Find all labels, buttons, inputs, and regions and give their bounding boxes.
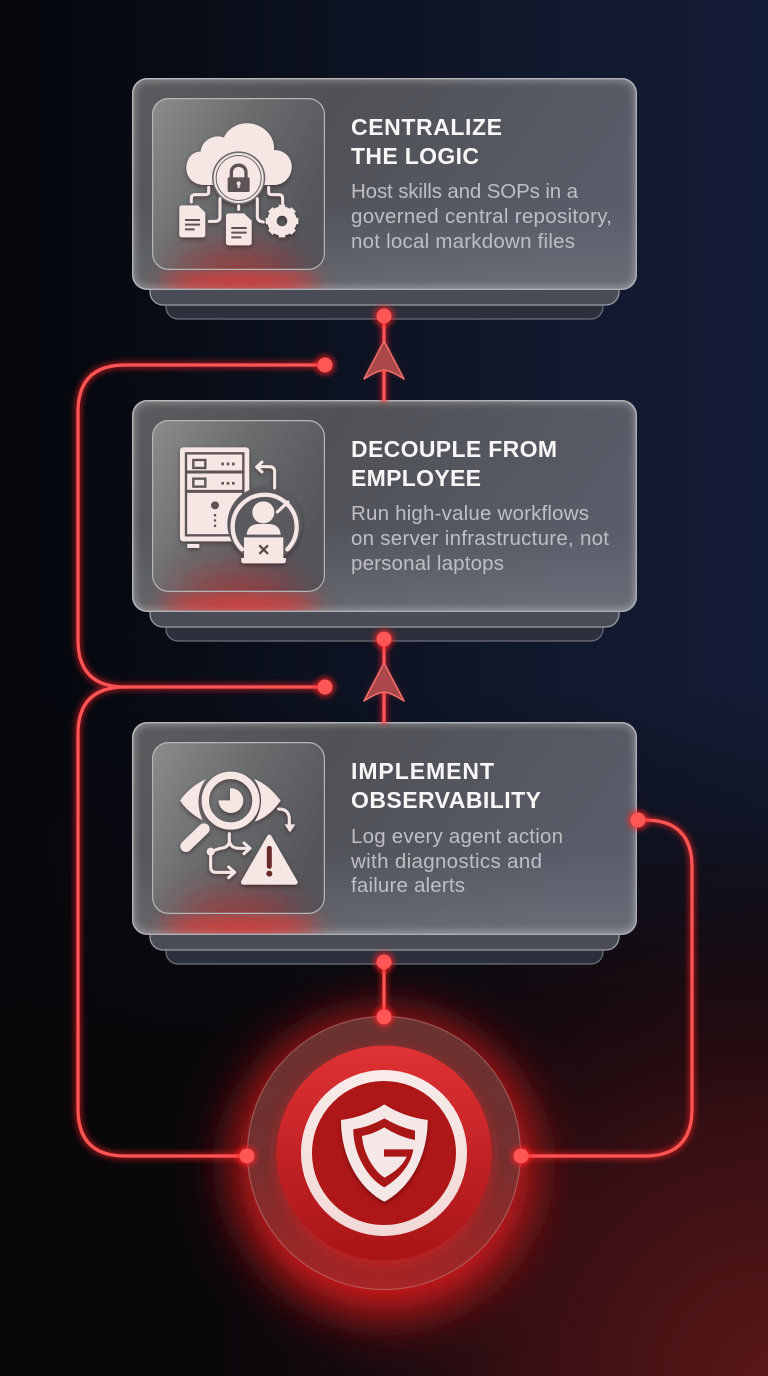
white ring xyxy=(306,1076,462,1230)
red disc xyxy=(276,1046,492,1260)
heading: DECOUPLE FROM xyxy=(351,436,557,462)
heading xyxy=(351,114,502,169)
arrowhead: lower xyxy=(364,663,404,722)
disc inner field xyxy=(306,1075,462,1231)
description: Run high-value workflows xyxy=(351,502,589,525)
back layers xyxy=(150,915,619,964)
heading xyxy=(351,758,541,813)
icon: server and employee with laptop xyxy=(180,447,302,563)
back layers xyxy=(150,270,619,319)
icon: shield with letter G xyxy=(341,1104,428,1202)
description xyxy=(350,825,563,897)
description: Log every agent action xyxy=(351,825,563,848)
description: not local markdown files xyxy=(351,230,575,253)
arrowhead: upper xyxy=(364,341,404,400)
outer translucent ring xyxy=(248,1016,520,1290)
icon tile xyxy=(152,420,325,592)
step card stack: centralize the logic xyxy=(132,78,637,319)
core emblem glow xyxy=(238,1020,530,1312)
card panel xyxy=(132,722,637,937)
glow layer xyxy=(78,316,692,1156)
step card stack: decouple from employee xyxy=(132,400,637,641)
description: governed central repository, xyxy=(351,205,612,228)
card panel xyxy=(132,400,637,615)
description: Host skills and SOPs in a xyxy=(351,180,579,203)
heading: THE LOGIC xyxy=(351,143,479,169)
connector nodes xyxy=(237,306,648,1166)
description: on server infrastructure, not xyxy=(351,527,609,550)
heading: CENTRALIZE xyxy=(351,114,502,140)
icon tile xyxy=(152,742,325,914)
step card stack: implement observability xyxy=(132,722,637,964)
heading: OBSERVABILITY xyxy=(351,787,541,813)
description: with diagnostics and xyxy=(350,850,542,873)
icon: eye, magnifier and warning triangle xyxy=(180,775,295,882)
description xyxy=(351,502,609,575)
line core xyxy=(78,316,692,1156)
card panel xyxy=(132,78,637,293)
description xyxy=(351,180,612,253)
heading: IMPLEMENT xyxy=(351,758,494,784)
description: failure alerts xyxy=(351,874,465,897)
icon tile xyxy=(152,98,325,270)
core emblem xyxy=(248,1016,520,1290)
back layers xyxy=(150,592,619,641)
heading xyxy=(351,436,557,491)
connector lines xyxy=(78,316,692,1156)
icon: cloud with lock, documents and gear xyxy=(179,123,298,245)
disc glow xyxy=(276,1049,492,1265)
heading: EMPLOYEE xyxy=(351,465,481,491)
description: personal laptops xyxy=(351,552,504,575)
